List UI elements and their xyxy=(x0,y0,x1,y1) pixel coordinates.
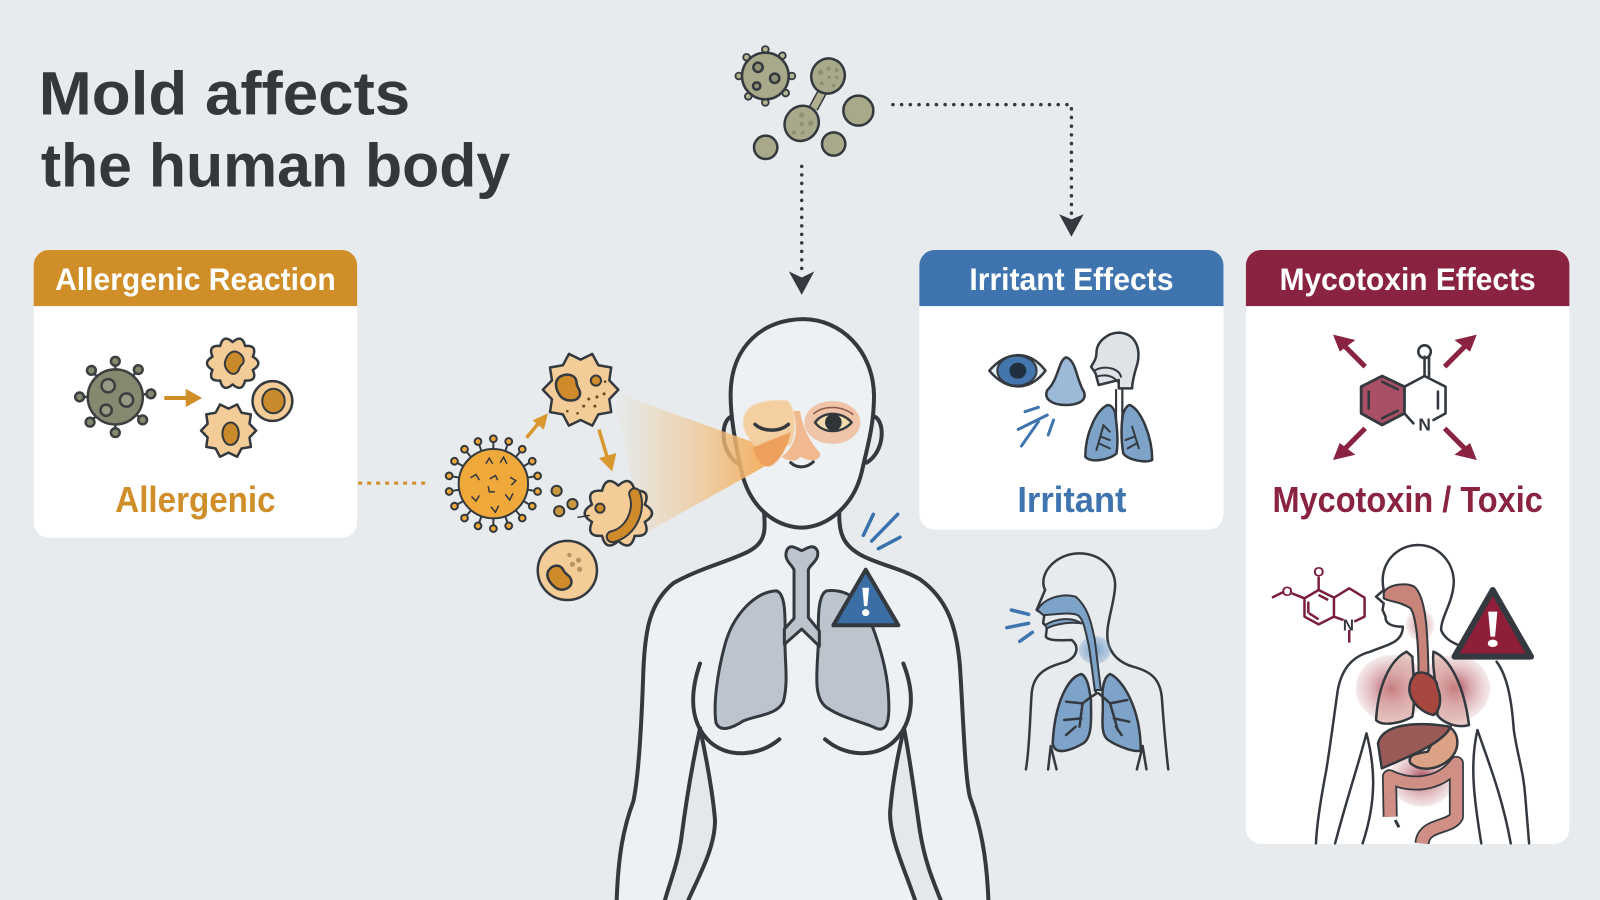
icon: small molecule xyxy=(1272,565,1365,643)
intestine xyxy=(1389,763,1456,843)
arrow: cell to cell xyxy=(599,430,616,471)
airway xyxy=(1384,584,1428,673)
icon: round cell xyxy=(538,541,597,600)
throat head xyxy=(1091,333,1138,388)
allergenic header: Allergenic Reaction xyxy=(55,261,336,297)
sneeze marks xyxy=(1018,407,1054,446)
allergenic label: Allergenic xyxy=(115,480,276,520)
panel: mycotoxin effects xyxy=(1246,250,1569,844)
arrow: spores to body xyxy=(789,166,814,295)
icon: toxin molecule with arrows xyxy=(1333,335,1477,460)
panel: irritant effects xyxy=(919,250,1223,530)
icon: mold spores source xyxy=(735,46,873,159)
connector: allergenic dotted xyxy=(358,482,428,485)
icon: spiky mast cell xyxy=(543,354,618,426)
arrow: spore to cell xyxy=(527,413,548,438)
arrow: spore to cells xyxy=(164,389,202,407)
icon: small molecule: O xyxy=(1313,565,1324,581)
icon: toxin molecule with arrows: N xyxy=(1418,415,1431,435)
title: the human body xyxy=(41,132,510,200)
arrow: spores to irritant xyxy=(893,105,1084,237)
irritant label: Irritant xyxy=(1017,480,1127,520)
allergen cascade xyxy=(445,354,652,600)
body outline xyxy=(1316,545,1529,843)
human figure xyxy=(613,319,988,900)
icon: degranulating cell xyxy=(552,481,652,546)
mycotoxin header: Mycotoxin Effects xyxy=(1280,261,1536,297)
icon: small molecule: O xyxy=(1282,584,1293,600)
mycotoxin label: Mycotoxin / Toxic xyxy=(1272,480,1543,520)
lungs xyxy=(1085,390,1152,461)
icon: grey mold spore xyxy=(75,357,156,437)
stomach xyxy=(1410,727,1457,769)
icon: red warning triangle xyxy=(1454,590,1531,657)
airway xyxy=(1037,595,1111,690)
nose xyxy=(1046,357,1085,405)
icon: small molecule: N xyxy=(1343,618,1354,635)
head xyxy=(724,319,882,528)
title: Mold affects xyxy=(39,59,410,127)
figure: organs affected xyxy=(1316,545,1531,843)
irritated face xyxy=(743,400,860,467)
liver xyxy=(1378,724,1451,768)
heart xyxy=(1409,673,1440,715)
highlight beam xyxy=(613,392,767,534)
lungs xyxy=(1376,652,1469,726)
lungs and trachea xyxy=(715,547,889,729)
irritant header: Irritant Effects xyxy=(969,261,1173,297)
icon: irritation marks xyxy=(863,514,900,549)
irritant header xyxy=(919,250,1223,306)
icon: immune cells xyxy=(201,339,292,457)
breath marks xyxy=(1007,610,1032,641)
mycotoxin header xyxy=(1246,250,1569,306)
eye xyxy=(989,355,1046,386)
panel: allergenic reaction xyxy=(34,250,357,538)
allergenic header xyxy=(34,250,357,306)
title xyxy=(39,59,510,200)
icon: respiratory tract figure xyxy=(1007,553,1168,769)
glows xyxy=(1356,609,1490,807)
lungs xyxy=(1053,674,1141,751)
icon: blue warning triangle xyxy=(833,570,898,625)
icon: eye nose throat lungs xyxy=(989,333,1152,461)
icon: orange spore xyxy=(445,435,541,532)
body silhouette xyxy=(617,510,988,900)
